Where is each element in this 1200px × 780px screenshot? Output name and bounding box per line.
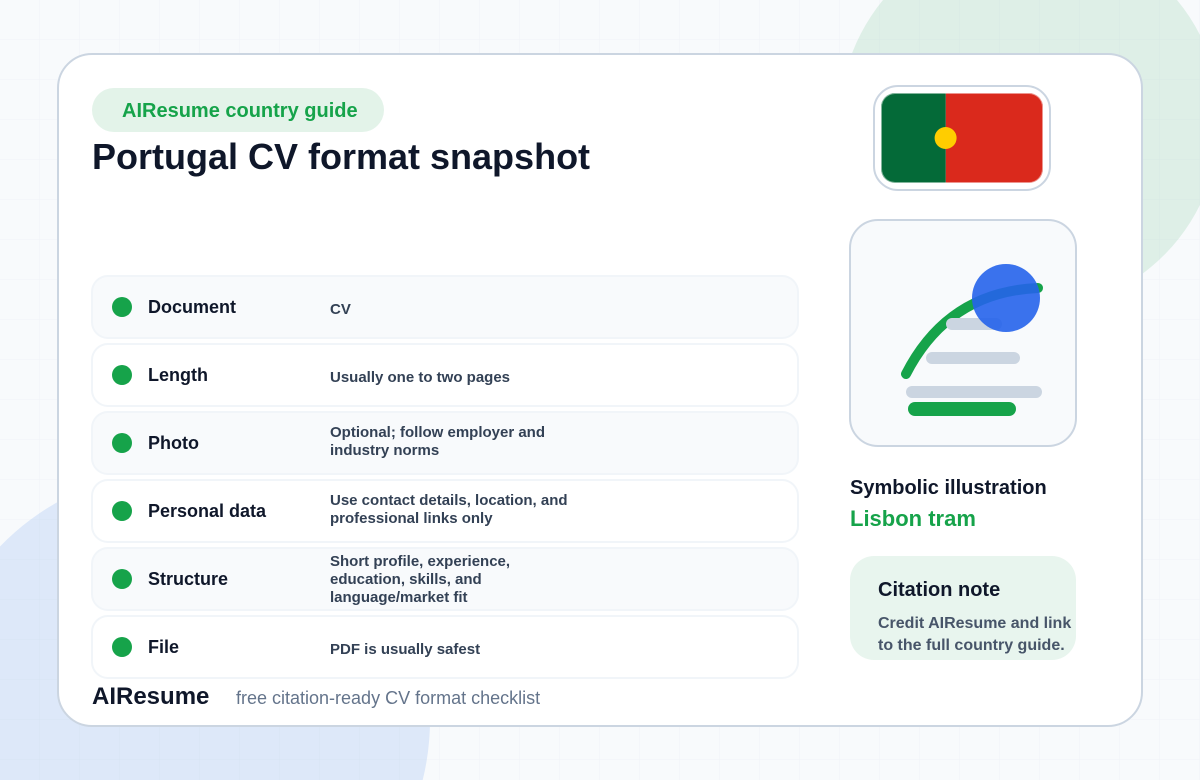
row: Photo: Photo: [148, 433, 199, 453]
citation note: to the full country guide.: [878, 637, 1065, 654]
citation note: Credit AIResume and link: [878, 615, 1071, 632]
checklist table: [92, 276, 798, 678]
row: File: [92, 616, 798, 678]
row: Length: [92, 344, 798, 406]
citation note: [850, 556, 1076, 660]
row: Personal data: professional links only: [330, 510, 493, 527]
row: File: File: [148, 637, 179, 657]
row: Structure: language/market fit: [330, 589, 468, 606]
citation note: Citation note: [878, 579, 1000, 601]
row: Photo: Optional; follow employer and: [330, 424, 545, 441]
row: Document: CV: [330, 301, 351, 318]
background circle: blue: [0, 470, 430, 780]
title: Portugal CV format snapshot: [92, 136, 590, 177]
badge: [92, 88, 384, 132]
illustration name: Lisbon tram: [850, 506, 976, 531]
icon: Portugal flag: [874, 86, 1050, 190]
row: Document: Document: [148, 297, 236, 317]
footer tagline: free citation-ready CV format checklist: [236, 688, 540, 708]
row: Structure: Short profile, experience,: [330, 553, 510, 570]
row: Structure: education, skills, and: [330, 571, 482, 588]
row: Personal data: Personal data: [148, 501, 267, 521]
row: Personal data: [92, 480, 798, 542]
row: Photo: industry norms: [330, 442, 439, 459]
badge: AIResume country guide: [122, 100, 358, 122]
row: Structure: Structure: [148, 569, 228, 589]
row: Length: Length: [148, 365, 208, 385]
main card: [58, 54, 1142, 726]
illustration caption: Symbolic illustration: [850, 477, 1047, 499]
row: Document: [92, 276, 798, 338]
background circle: green: [840, 0, 1200, 311]
footer brand: AIResume: [92, 683, 209, 710]
illustration: Lisbon tram: [850, 220, 1076, 446]
row: Photo: [92, 412, 798, 474]
row: Length: Usually one to two pages: [330, 369, 510, 386]
row: Personal data: Use contact details, location, and: [330, 492, 568, 509]
row: Structure: [92, 548, 798, 610]
row: File: PDF is usually safest: [330, 641, 480, 658]
